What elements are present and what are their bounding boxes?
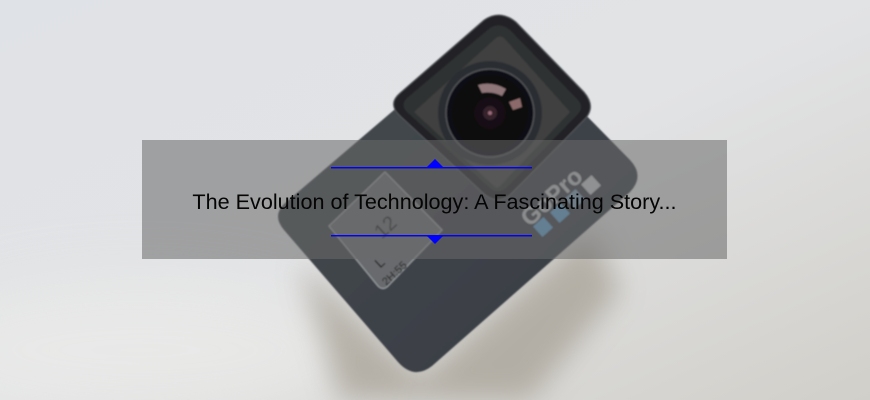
top triangle marker [427,159,443,167]
LCD readout [370,212,410,288]
shadow [300,228,620,400]
title banner [142,140,727,259]
LCD readout: 12 [370,212,402,243]
LCD readout: 2H:55 [380,259,410,288]
lens [438,61,542,165]
lens housing [394,15,591,200]
top divider line [331,167,532,168]
LCD screen [329,172,442,288]
LCD readout: L [371,254,388,271]
camera body [278,15,638,372]
bottom triangle marker [427,236,443,244]
GoPro logo: GoPro [516,163,588,232]
bottom divider line [331,235,532,236]
title text: The Evolution of Technology: A Fascinating Story... [192,189,677,214]
